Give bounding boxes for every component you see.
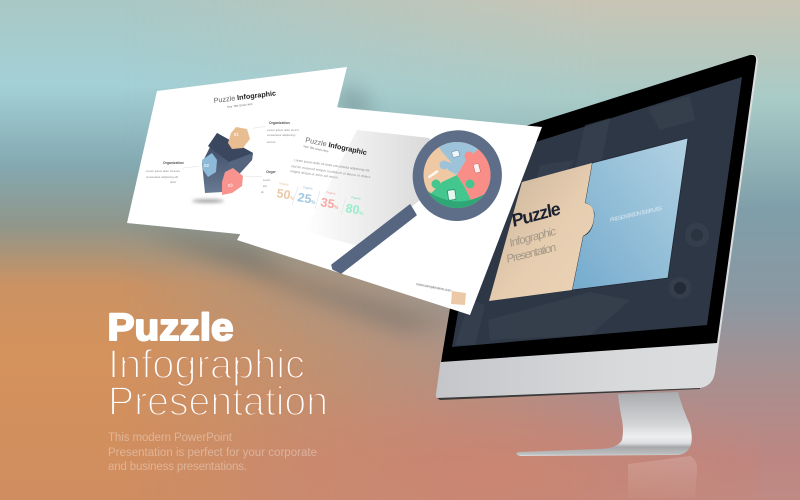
magnifier ring: [400, 118, 515, 234]
magnifier puzzle: [424, 142, 490, 208]
slide paragraph: magna aliqua ut enim ad minim: [290, 169, 338, 180]
slide title: Your Title Goes Here: [227, 102, 253, 109]
slide footer url: www.samplename.com: [416, 281, 453, 293]
label right: Lorem: [263, 178, 272, 182]
label left: Lorem ipsum dolor sit amet: [146, 169, 180, 173]
Puzzle heading on screen: Puzzle: [510, 198, 562, 231]
stat 80%: 80%: [344, 201, 366, 218]
slide paragraph: sed do eiusmod tempor incididunt ut labore et dolore: [291, 164, 371, 179]
description paragraph: [108, 432, 317, 473]
description paragraph: and business presentations.: [108, 461, 247, 473]
label left: dolor: [170, 180, 176, 184]
cube piece 03: 03: [227, 183, 234, 188]
stat 80%: [344, 195, 366, 218]
description paragraph: Presentation is perfect for your corporate: [108, 447, 317, 459]
puzzle piece tan: [489, 163, 594, 301]
stat 50%: Organic: [279, 181, 290, 187]
monitor screen: [452, 77, 742, 347]
slide title: Your Title Goes Here: [303, 144, 329, 153]
stat 50%: 50%: [275, 186, 297, 203]
label right: [245, 170, 278, 194]
stat 35%: 35%: [319, 195, 341, 212]
Presentation label on screen: Presentation: [506, 242, 557, 266]
monitor base dark line: [437, 388, 700, 400]
stat 50%: [275, 181, 297, 203]
magnifier handle: [332, 205, 416, 273]
cube piece 02: 02: [204, 163, 210, 168]
heading: Presentation: Presentation: [108, 378, 328, 424]
label right: do: [261, 190, 265, 194]
stat 35%: [319, 190, 341, 212]
slide paragraph: [290, 158, 371, 180]
monitor black bezel: [441, 55, 756, 362]
back slide: cube infographic: [127, 67, 347, 240]
stat dividers: [292, 187, 346, 215]
label top: Organization: [269, 121, 290, 125]
monitor stand reflection: [628, 456, 697, 498]
stat 80%: Organic: [351, 195, 362, 201]
label top: sed do: [267, 140, 276, 144]
monitor stand: [516, 392, 692, 456]
label right: ipsum: [263, 184, 271, 188]
iMac monitor: [436, 54, 758, 498]
stat 35%: Organic: [326, 190, 337, 196]
screen photo shapes: [455, 96, 709, 345]
stat 25%: Organic: [303, 185, 314, 191]
label left: Organization: [163, 161, 184, 165]
magnifier icons: [428, 150, 481, 200]
heading: Infographic: Infographic: [108, 341, 305, 387]
slide shadows: [140, 85, 450, 330]
stat 25%: 25%: [296, 190, 318, 207]
description paragraph: This modern PowerPoint: [108, 432, 233, 444]
cube piece 01: 01: [233, 132, 240, 137]
label top: consectetur adipiscing elit: [267, 133, 299, 137]
stat 25%: [296, 185, 318, 207]
puzzle piece blue: [572, 138, 688, 290]
label right: Organ: [266, 170, 278, 174]
cube: [192, 127, 253, 203]
slide title: Puzzle Infographic: [305, 135, 368, 157]
presentation template label: PRESENTATION TEMPLATE: [610, 206, 663, 224]
slide footer puzzle mark: [451, 291, 466, 305]
label top: Lorem ipsum dolor sit amet: [267, 128, 301, 132]
front slide: magnifier infographic: [237, 105, 542, 315]
main heading: [108, 307, 328, 424]
slide paragraph: Lorem ipsum dolor sit amet consectetur adipiscing elit: [294, 158, 370, 173]
label left: [146, 161, 199, 184]
gray panel: [305, 130, 430, 247]
slide title: Puzzle Infographic: [213, 88, 276, 105]
label top: [253, 121, 301, 144]
label left: consectetur adipiscing elit: [146, 175, 178, 179]
monitor silver body: [436, 54, 758, 399]
Infographic label on screen: Infographic: [509, 226, 557, 250]
heading: Puzzle: Puzzle: [108, 307, 234, 349]
